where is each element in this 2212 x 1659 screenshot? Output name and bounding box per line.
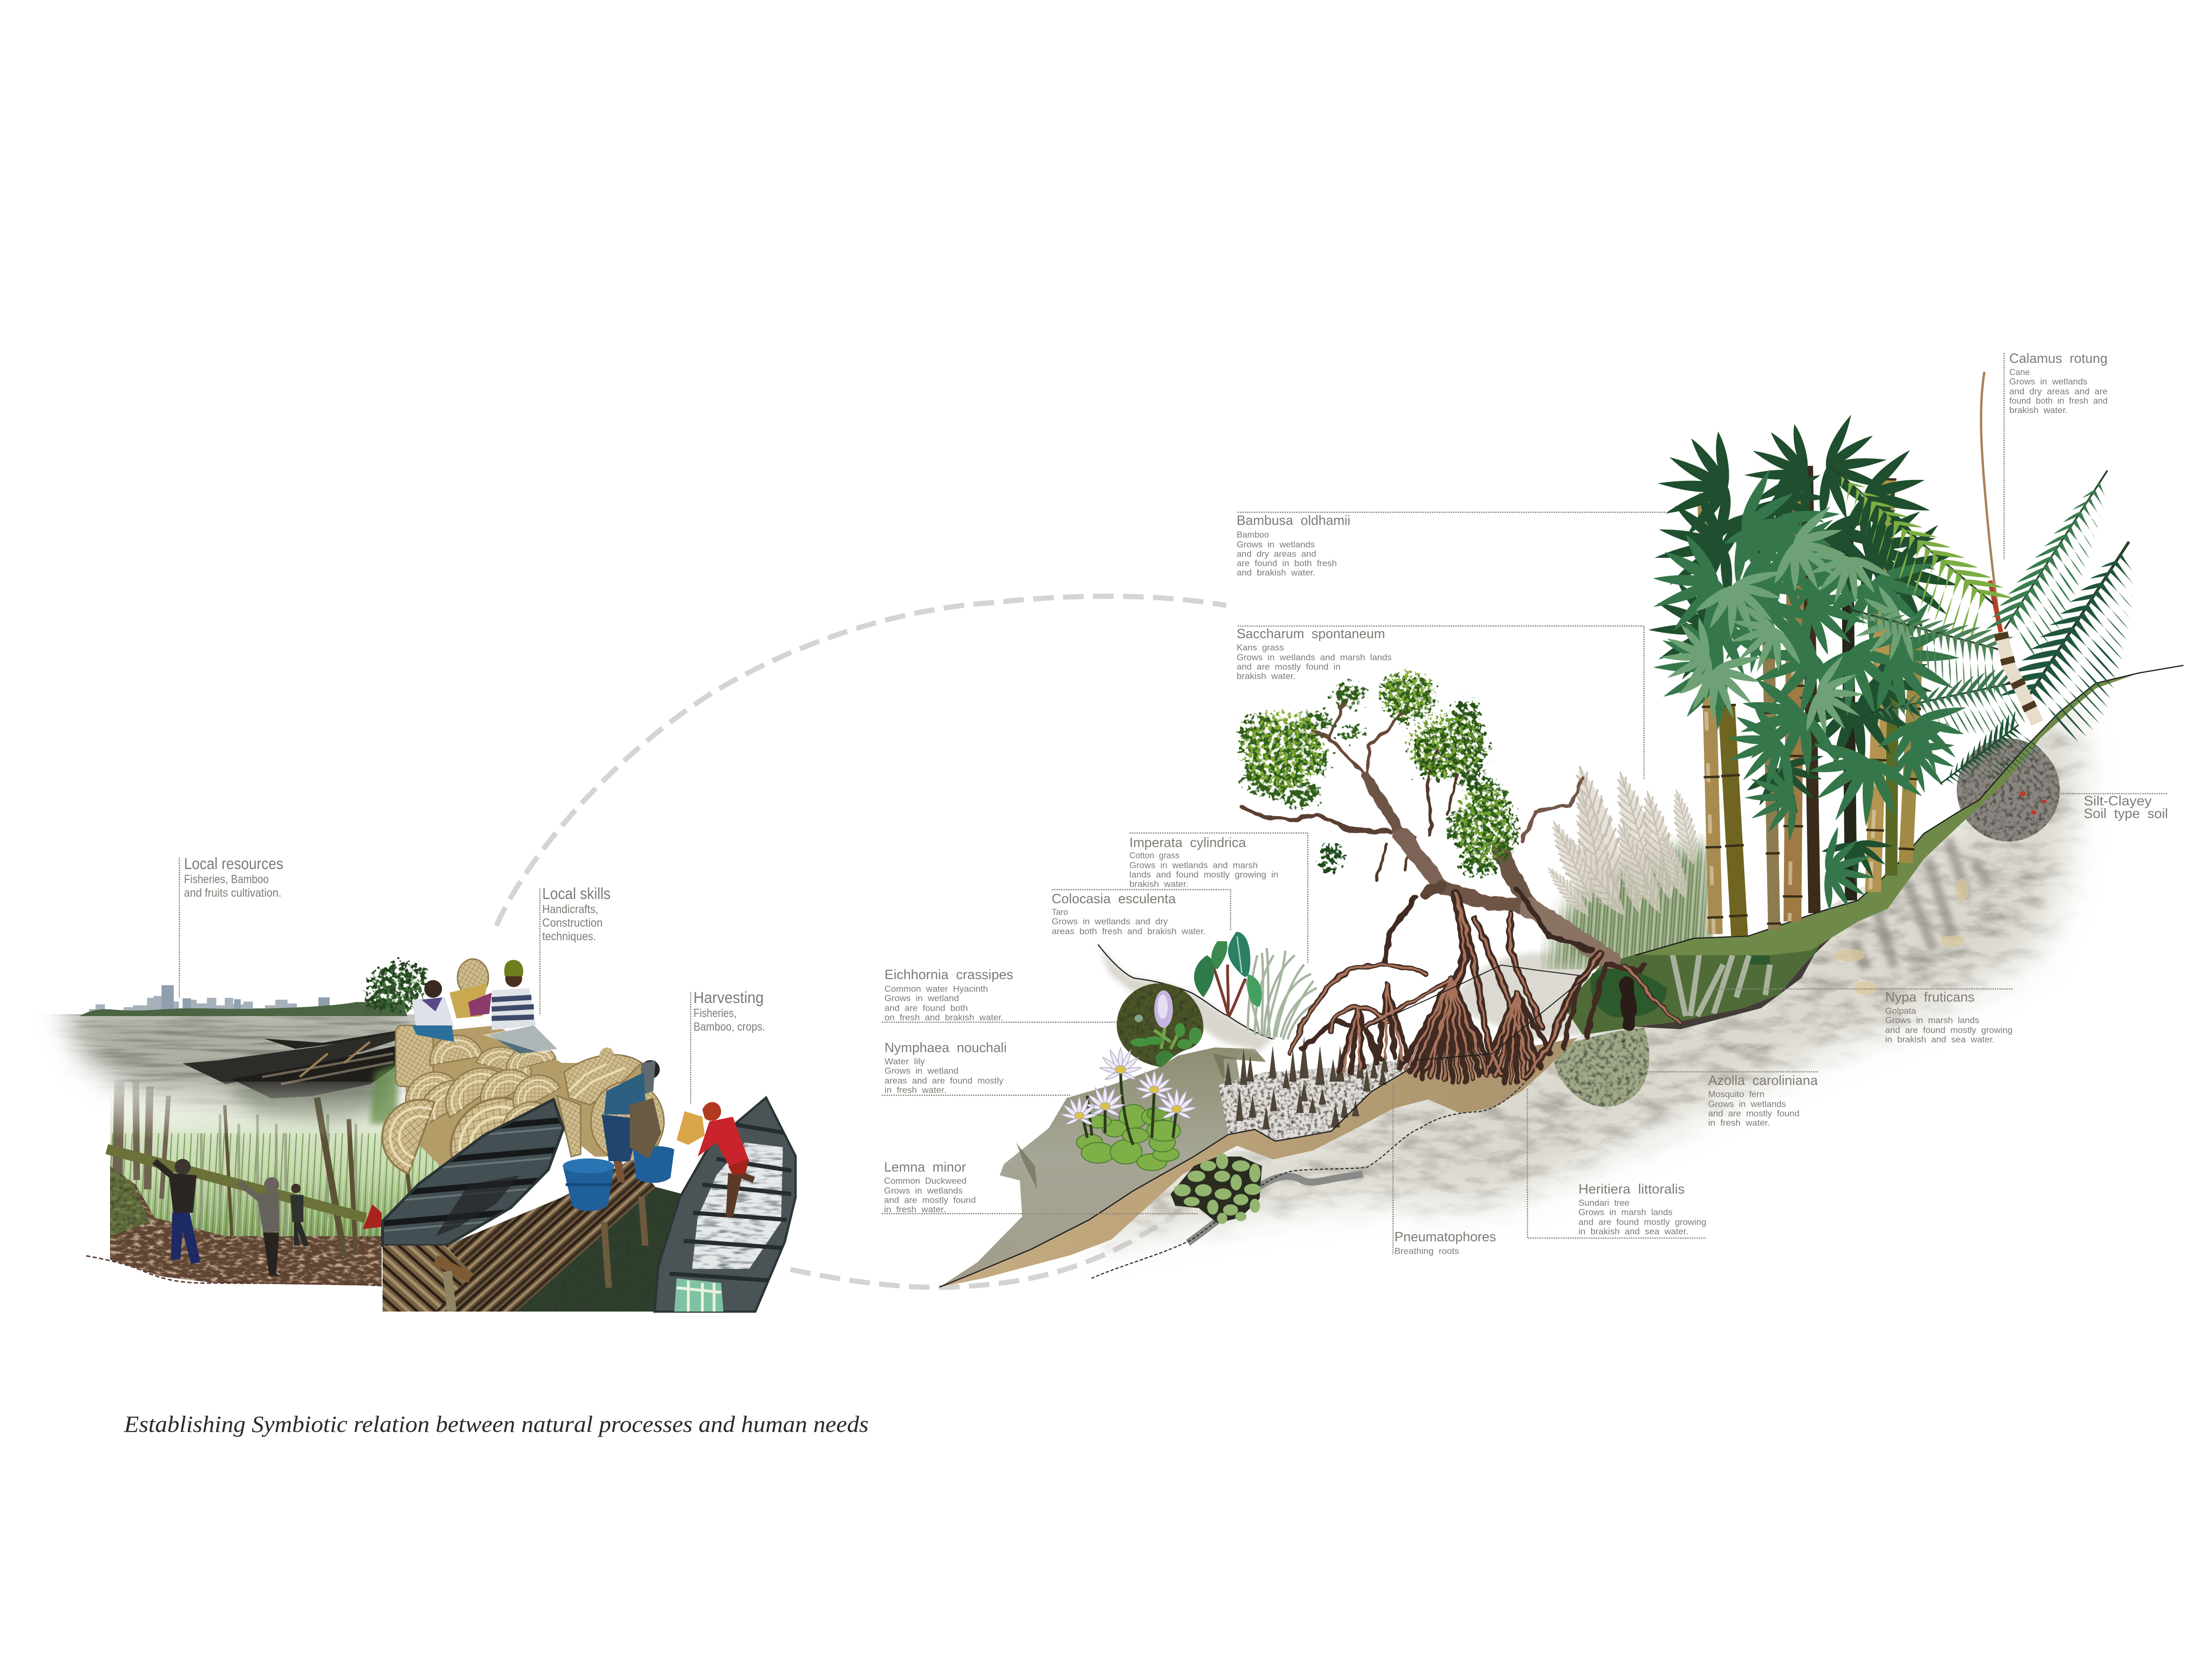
label: Lemna minor: Grows in wetlands	[884, 1186, 963, 1195]
label: Nymphaea nouchali: in fresh water.	[885, 1085, 946, 1095]
label: Eichhornia crassipes: Grows in wetland	[885, 994, 959, 1003]
calamus rotung cane palm	[1796, 372, 2191, 816]
dock posts	[604, 1196, 645, 1288]
caption: Establishing Symbiotic relation between natural processes and human needs	[124, 1411, 869, 1437]
worker 2	[239, 1177, 281, 1276]
soil sample circle: silt-clayey	[1957, 738, 2060, 841]
lead lines	[882, 353, 2168, 1254]
label: Nypa fruticans: in brakish and sea water.	[1885, 1035, 1995, 1044]
label: Heritiera littoralis: Heritiera littoralis	[1578, 1182, 1685, 1197]
label: Azolla caroliniana: Grows in wetlands	[1708, 1099, 1786, 1109]
label: Imperata cylindrica: Grows in wetlands and marsh	[1129, 861, 1258, 870]
label: Imperata cylindrica: brakish water.	[1129, 879, 1188, 889]
mangrove trunk and branches	[1242, 700, 1611, 960]
label: Nymphaea nouchali	[885, 1040, 1007, 1095]
bamboo foliage	[1637, 410, 1985, 890]
label: Local resources: Fisheries, Bamboo	[184, 873, 269, 886]
upper bank	[1098, 944, 1273, 1051]
worker 3	[290, 1184, 309, 1246]
imperata grass	[1246, 948, 1318, 1040]
bamboo forest photo	[110, 1082, 440, 1286]
bamboo stalks	[1703, 466, 1917, 936]
worker 1	[155, 1159, 200, 1264]
label: Bambusa oldhamii: and dry areas and	[1237, 549, 1316, 559]
dashed arc: link from local skills to wetland	[496, 596, 1226, 926]
label: Calamus rotung	[2009, 351, 2108, 415]
label: Local skills: techniques.	[542, 930, 596, 943]
colocasia taro plant	[1194, 932, 1262, 1016]
label: Local skills	[542, 885, 611, 943]
label: Lemna minor: and are mostly found	[884, 1195, 976, 1205]
label: Calamus rotung: brakish water.	[2009, 406, 2068, 415]
lake water	[61, 1002, 421, 1114]
label: Imperata cylindrica: lands and found mostly growing in	[1129, 870, 1278, 879]
label: Bambusa oldhamii: and brakish water.	[1237, 568, 1315, 577]
label: Heritiera littoralis: Grows in marsh lands	[1578, 1208, 1673, 1217]
label: Local resources: Local resources	[184, 855, 283, 873]
label: Nymphaea nouchali: Nymphaea nouchali	[885, 1040, 1007, 1055]
label: Bambusa oldhamii: Grows in wetlands	[1237, 540, 1315, 549]
label: Calamus rotung: Grows in wetlands	[2009, 377, 2087, 386]
label: Colocasia esculenta: Grows in wetlands and dry	[1052, 917, 1168, 926]
label: Saccharum spontaneum: Saccharum spontaneum	[1237, 627, 1385, 641]
label: Nypa fruticans	[1885, 990, 2013, 1044]
label: Saccharum spontaneum: Kans grass	[1237, 643, 1284, 652]
fine dashed soil horizon	[1091, 1078, 1528, 1278]
label: Harvesting	[693, 989, 765, 1033]
gray hump behind roots	[1456, 953, 1592, 1040]
mangrove prop roots	[1291, 894, 1679, 1082]
fine terrain lines over roots	[1367, 965, 1591, 1060]
label: Nypa fruticans: and are found mostly growing	[1885, 1025, 2013, 1035]
tan soil band	[939, 1038, 1578, 1287]
water lily pads	[1077, 1105, 1180, 1171]
label: Imperata cylindrica: Imperata cylindrica	[1129, 835, 1246, 850]
worker in blue shirt	[602, 1060, 661, 1182]
label: Nymphaea nouchali: areas and are found mostly	[885, 1076, 1003, 1085]
label: Local resources: and fruits cultivation.	[184, 886, 281, 900]
label: Nymphaea nouchali: Grows in wetland	[885, 1066, 959, 1076]
lakeside tree	[365, 962, 428, 1014]
label: Lemna minor: Common Duckweed	[884, 1176, 966, 1186]
label: Azolla caroliniana	[1708, 1073, 1818, 1128]
fish boat	[655, 1098, 796, 1312]
gray rock strip	[1188, 1174, 1363, 1243]
label lead: local resources	[179, 858, 180, 998]
ground dashed edge line	[86, 1256, 382, 1286]
city skyline	[89, 985, 330, 1014]
bamboo pole carried by workers	[107, 1149, 366, 1218]
label: Harvesting: Fisheries,	[693, 1007, 737, 1020]
terrain line	[1636, 665, 2183, 955]
baskets pile	[371, 1025, 665, 1175]
label: Bambusa oldhamii	[1237, 513, 1350, 577]
label: Saccharum spontaneum	[1237, 627, 1392, 681]
label: Pneumatophores: Pneumatophores	[1394, 1230, 1496, 1245]
label: Local skills: Local skills	[542, 885, 611, 903]
label: Silt-Clayey soil type: Soil type soil	[2084, 806, 2168, 821]
label: Heritiera littoralis: and are found mostly growing	[1578, 1217, 1706, 1227]
label: Local skills: Construction	[542, 916, 603, 929]
label: Colocasia esculenta: Colocasia esculenta	[1052, 892, 1176, 907]
label: Lemna minor	[884, 1160, 976, 1214]
green ground band	[1639, 673, 2139, 955]
label: Azolla caroliniana: Mosquito fern	[1708, 1090, 1764, 1099]
pond tree reflection	[1016, 1054, 1241, 1189]
craftsmen	[412, 959, 557, 1054]
label: Eichhornia crassipes: on fresh and brakish water.	[885, 1013, 1003, 1022]
label: Calamus rotung: found both in fresh and	[2009, 396, 2108, 406]
soil circle debris	[2020, 791, 2047, 815]
understory nypa palm zone	[1564, 892, 1891, 1035]
water hyacinth circle	[1117, 983, 1206, 1068]
water lily flowers	[1060, 1048, 1197, 1126]
label: Nymphaea nouchali: Water lily	[885, 1057, 925, 1066]
yellow jug	[677, 1111, 705, 1145]
label: Bambusa oldhamii: are found in both fresh	[1237, 559, 1337, 568]
bamboo dock	[383, 1159, 656, 1312]
label: Harvesting: Bamboo, crops.	[693, 1020, 765, 1033]
label: Eichhornia crassipes: Eichhornia crassipes	[885, 967, 1013, 982]
label: Nypa fruticans: Golpata	[1885, 1006, 1917, 1016]
label: Harvesting: Harvesting	[693, 989, 764, 1007]
label: Pneumatophores: Breathing roots	[1394, 1246, 1459, 1256]
panel: human side photo collage	[61, 855, 796, 1316]
pneumatophore spikes	[1224, 1036, 1404, 1129]
label: Silt-Clayey soil type: Silt-Clayey	[2084, 794, 2152, 809]
panel: wetland ecosystem section	[882, 351, 2191, 1287]
blue buckets	[563, 1146, 674, 1211]
buried pneumatophores	[1854, 838, 1990, 969]
label: Local resources	[184, 855, 283, 900]
kans grass plumes	[1542, 761, 1703, 924]
dark vegetation under dock	[516, 1187, 683, 1312]
label: Imperata cylindrica: Cotton grass	[1129, 851, 1180, 860]
label: Calamus rotung: Calamus rotung	[2009, 351, 2108, 366]
label: Heritiera littoralis: Sundari tree	[1578, 1198, 1630, 1208]
label: Colocasia esculenta: Taro	[1052, 907, 1068, 917]
dark wooden boat	[383, 1099, 563, 1246]
shoreline tree line	[80, 1002, 407, 1016]
label: Eichhornia crassipes	[885, 967, 1013, 1022]
label: Saccharum spontaneum: and are mostly found in	[1237, 662, 1341, 671]
label: Pneumatophores	[1394, 1230, 1496, 1256]
label: Azolla caroliniana: and are mostly found	[1708, 1109, 1799, 1118]
label: Lemna minor: in fresh water.	[884, 1205, 946, 1214]
label: Calamus rotung: and dry areas and are	[2009, 387, 2108, 396]
label: Nypa fruticans: Grows in marsh lands	[1885, 1016, 1979, 1025]
label: Bambusa oldhamii: Bambusa oldhamii	[1237, 513, 1350, 528]
sandy subsoil	[1089, 702, 2079, 1241]
label: Local skills: Handicrafts,	[542, 903, 598, 916]
label: Eichhornia crassipes: and are found both	[885, 1003, 968, 1013]
boat reflections	[225, 1077, 389, 1128]
label: Imperata cylindrica	[1129, 835, 1278, 889]
infographic scene	[48, 353, 2184, 1437]
duckweed cluster	[1171, 1153, 1262, 1224]
moored boats	[183, 1031, 398, 1099]
water lily stems	[1082, 1072, 1177, 1145]
water in boat	[435, 1175, 520, 1236]
label: Azolla caroliniana: Azolla caroliniana	[1708, 1073, 1818, 1088]
label: Colocasia esculenta: areas both fresh and brakish water.	[1052, 927, 1206, 936]
dashed arc: link from harvesting to wetland	[790, 1196, 1199, 1287]
label: Lemna minor: Lemna minor	[884, 1160, 966, 1175]
label: Eichhornia crassipes: Common water Hyacinth	[885, 984, 988, 994]
terrain line	[939, 1054, 1492, 1287]
label: Colocasia esculenta	[1052, 892, 1206, 936]
label: Silt-Clayey soil type	[2084, 794, 2168, 821]
label: Bambusa oldhamii: Bamboo	[1237, 530, 1269, 539]
kans grass base	[1541, 833, 1714, 969]
label: Nypa fruticans: Nypa fruticans	[1885, 990, 1975, 1005]
label: Saccharum spontaneum: brakish water.	[1237, 671, 1296, 681]
reeds	[370, 1063, 398, 1124]
label: Heritiera littoralis	[1578, 1182, 1706, 1236]
label: Heritiera littoralis: in brakish and sea water.	[1578, 1227, 1688, 1236]
label: Calamus rotung: Cane	[2009, 368, 2030, 377]
pond	[939, 1047, 1266, 1287]
red cloth figure	[363, 1204, 382, 1229]
mangrove foliage	[1240, 672, 1517, 876]
label lead: harvesting	[690, 992, 691, 1105]
sample circle: azolla	[1553, 1028, 1649, 1107]
mudflat with pneumatophores	[1219, 1058, 1416, 1141]
label: Saccharum spontaneum: Grows in wetlands and marsh lands	[1237, 653, 1392, 662]
label: Azolla caroliniana: in fresh water.	[1708, 1118, 1770, 1128]
worker in red shirt	[698, 1102, 754, 1217]
label lead: local skills	[539, 888, 540, 1015]
